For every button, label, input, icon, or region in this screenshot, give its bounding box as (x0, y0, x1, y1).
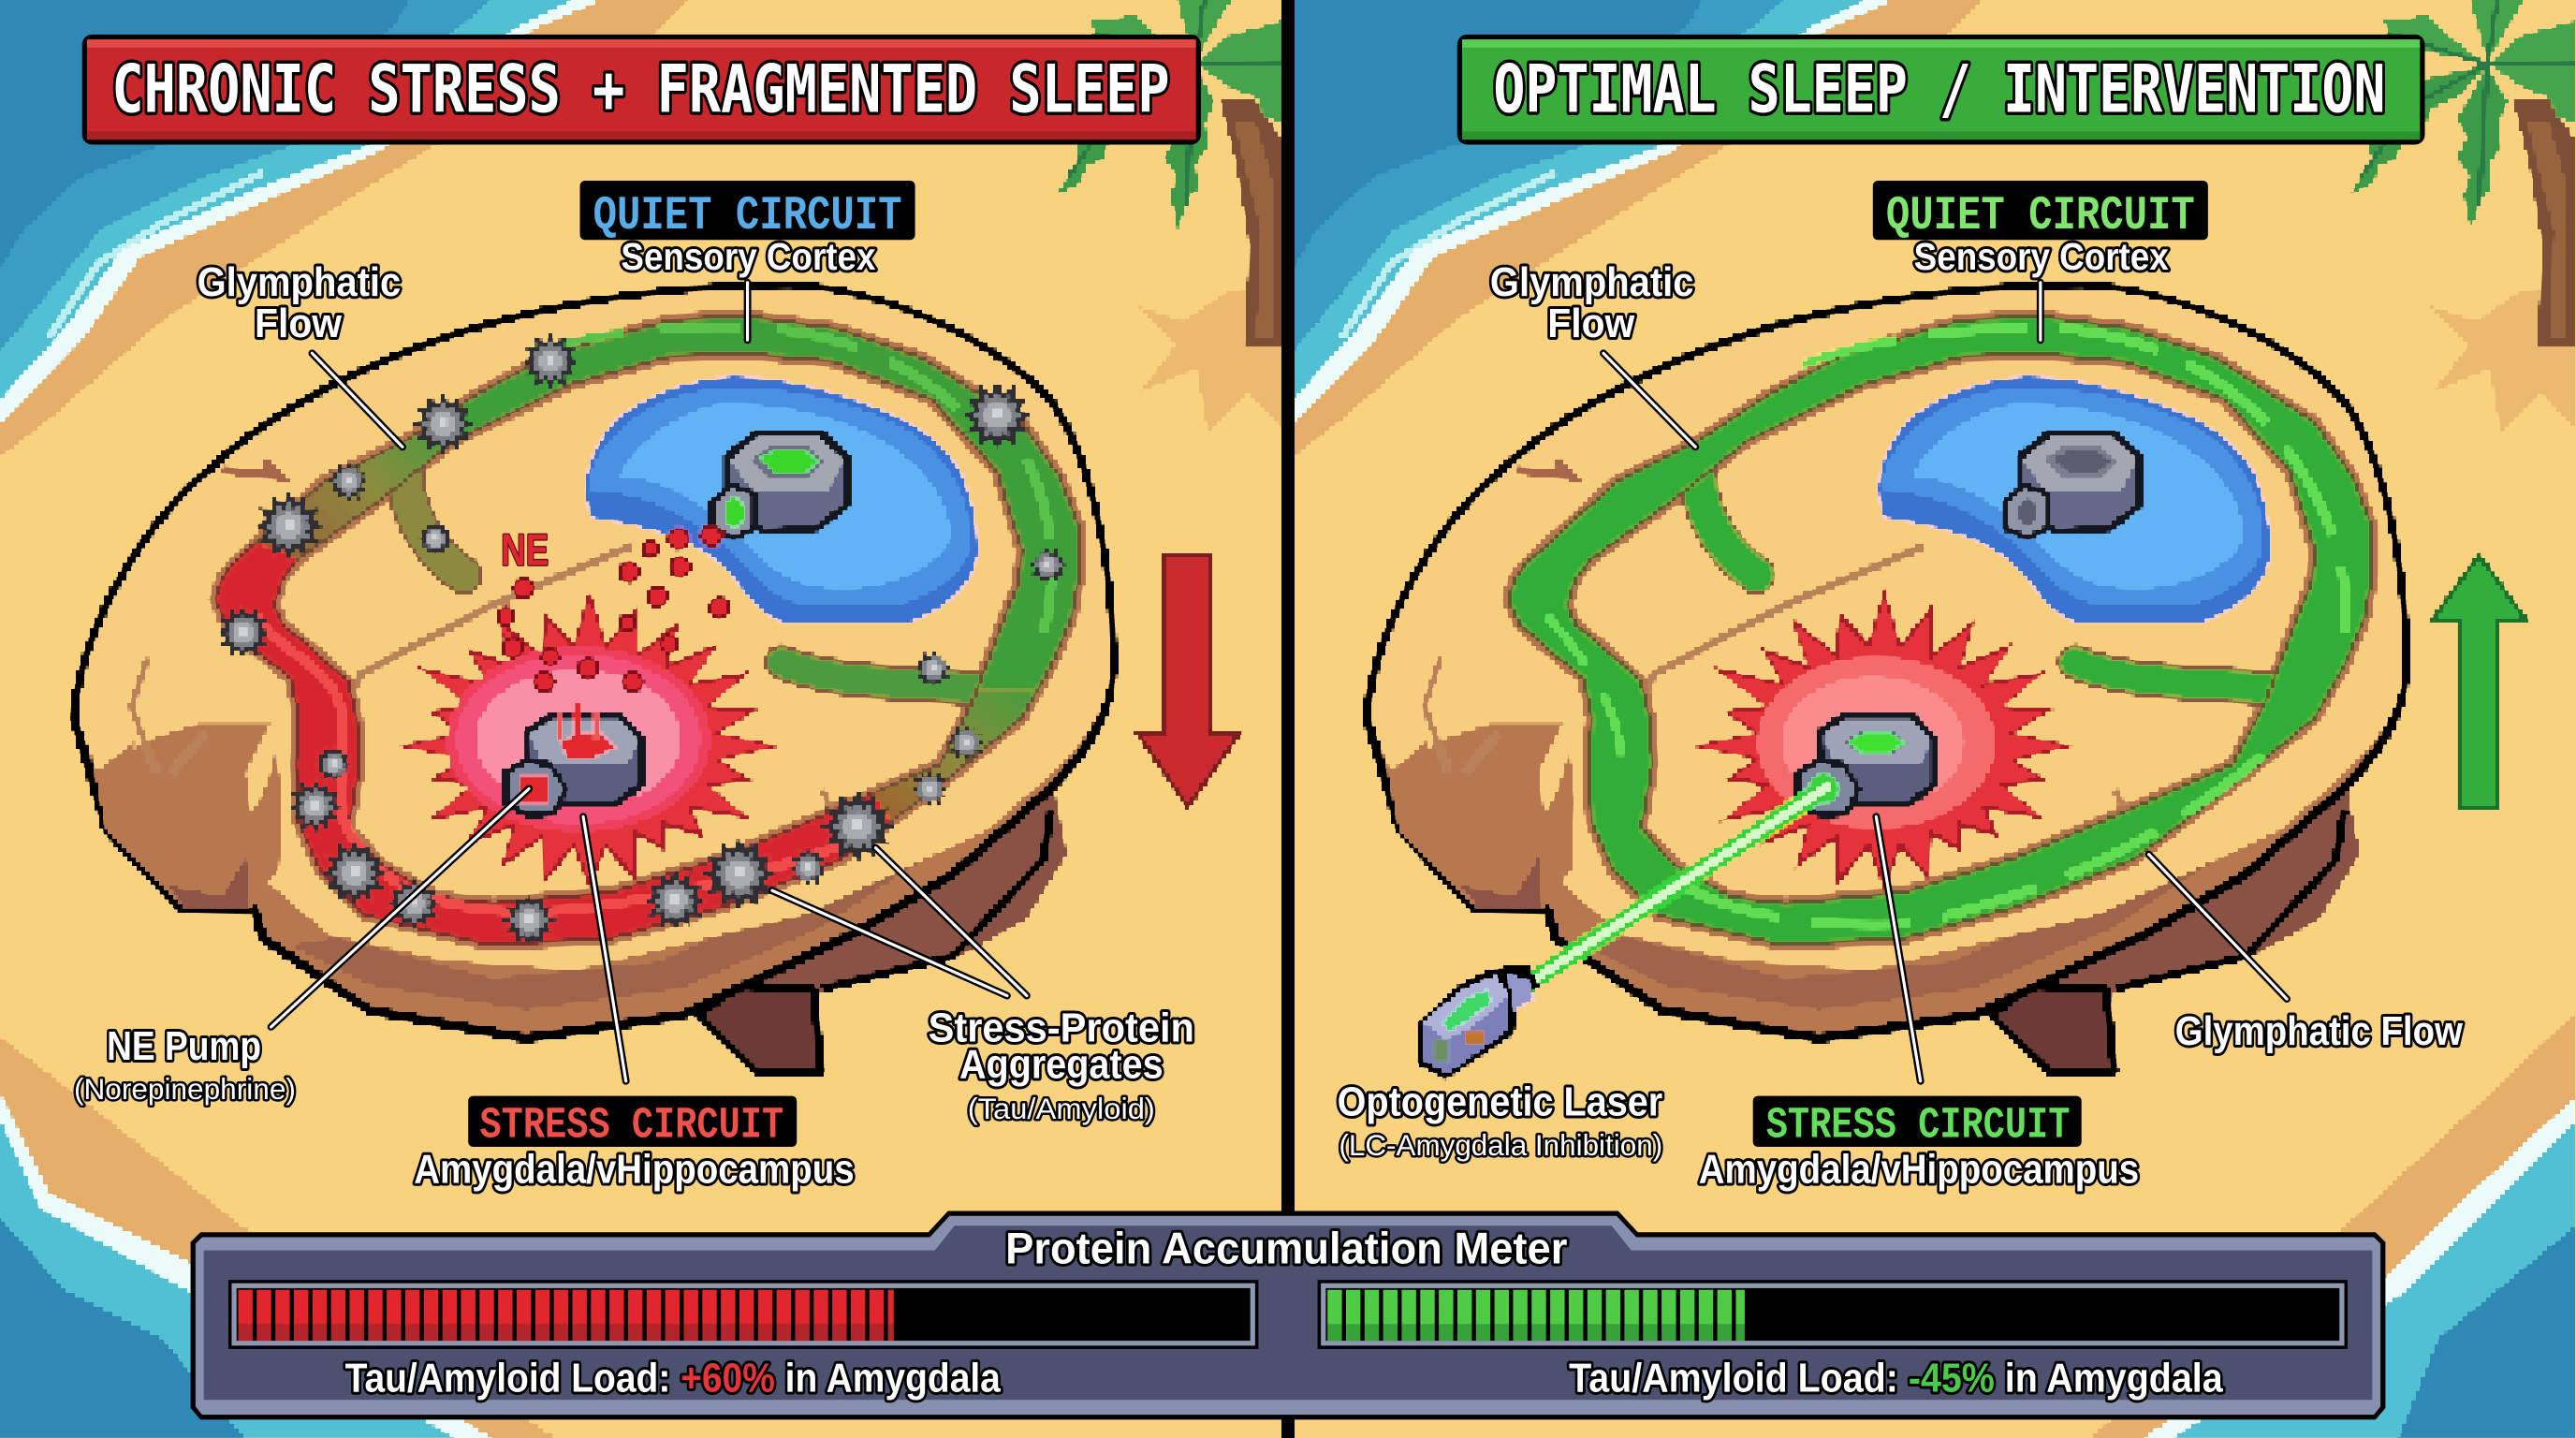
meter title: Protein Accumulation Meter (1005, 1225, 1567, 1274)
label: stress-protein aggregates (929, 1005, 1194, 1125)
label: glymphatic flow upper right: Glymphatic (1490, 259, 1694, 305)
beach and ocean corner, right panel (1293, 0, 1983, 459)
heading: optimal sleep: OPTIMAL SLEEP / INTERVENTION (1493, 51, 2385, 127)
label: NE pump: (Norepinephrine) (74, 1072, 296, 1106)
label: optogenetic laser (1338, 1079, 1662, 1162)
label: optogenetic laser: (LC-Amygdala Inhibition) (1339, 1128, 1662, 1162)
heading: optimal sleep (1457, 35, 2425, 144)
leader lines, left panel (271, 283, 1027, 1081)
optogenetic laser beam (1519, 787, 1827, 990)
stress load readout: Tau/Amyloid Load: +60% in Amygdala (345, 1356, 1001, 1401)
label: sensory cortex left: Sensory Cortex (621, 235, 876, 278)
glymphatic channel, clogged (215, 315, 1079, 945)
label: amygdala left: Amygdala/vHippocampus (414, 1147, 855, 1193)
lower-left ocean (0, 1035, 559, 1438)
red load bar (228, 1280, 1258, 1349)
lower-right ocean (2086, 1010, 2576, 1438)
green load bar (1318, 1280, 2348, 1349)
label: NE pump: NE Pump (107, 1023, 261, 1069)
amygdala device, green active (1794, 712, 1939, 820)
label: quiet circuit right: QUIET CIRCUIT (1886, 190, 2195, 243)
label: glymphatic flow upper right (1490, 259, 1694, 346)
label: glymphatic flow left: Flow (255, 301, 343, 346)
label: glymphatic flow upper right: Flow (1547, 301, 1635, 346)
stress-protein aggregates (220, 337, 1064, 943)
brain island, left panel (74, 286, 1112, 1071)
centre divider (1281, 0, 1295, 1438)
brain island, right panel (1367, 286, 2405, 1071)
label: amygdala right: Amygdala/vHippocampus (1699, 1147, 2139, 1193)
leader lines, right panel (1603, 283, 2287, 1081)
quiet circuit device, active green (708, 429, 851, 542)
palm tree, left panel (1055, 0, 1288, 435)
label: stress circuit left: STRESS CIRCUIT (479, 1101, 783, 1151)
arrow up, green (2432, 555, 2526, 808)
label: stress circuit right: STRESS CIRCUIT (1766, 1101, 2070, 1151)
glymphatic channel, clear (1508, 315, 2372, 945)
stress burst, right panel calmed (1687, 585, 2078, 893)
optogenetic laser device (1416, 966, 1541, 1081)
panel: optimal sleep and intervention (1293, 0, 2576, 1438)
label: NE pump (74, 1023, 296, 1106)
quiet lake, left panel (586, 376, 977, 624)
label: NE: NE (501, 526, 549, 576)
label: glymphatic flow lower right: Glymphatic Flow (2175, 1008, 2464, 1054)
NE norepinephrine particles (498, 526, 729, 692)
quiet lake, right panel (1879, 376, 2271, 624)
label: stress-protein aggregates: (Tau/Amyloid) (968, 1092, 1155, 1125)
label: glymphatic flow left: Glymphatic (198, 259, 401, 305)
panel: protein accumulation meter (191, 1211, 2385, 1419)
label: quiet circuit left: QUIET CIRCUIT (593, 190, 902, 243)
heading: chronic stress: CHRONIC STRESS + FRAGMENTED SLEEP (111, 51, 1170, 127)
label: sensory cortex right: Sensory Cortex (1914, 235, 2169, 278)
heading: chronic stress (82, 35, 1201, 144)
arrow down, red (1138, 555, 1238, 807)
left panel pixel art scene (0, 0, 1288, 1438)
label: stress-protein aggregates: Stress-Protein (929, 1005, 1194, 1051)
panel: chronic stress and fragmented sleep (0, 0, 1288, 1438)
label: glymphatic flow left (198, 259, 401, 346)
optimal load readout: Tau/Amyloid Load: -45% in Amygdala (1569, 1356, 2223, 1401)
NE pump device, stress circuit (501, 703, 646, 820)
stress burst, left panel (392, 585, 783, 893)
label: optogenetic laser: Optogenetic Laser (1338, 1079, 1662, 1125)
right panel pixel art scene (1293, 0, 2576, 1438)
palm tree, right panel (2348, 0, 2576, 435)
label: stress-protein aggregates: Aggregates (959, 1041, 1164, 1087)
quiet circuit device, idle grey (2001, 429, 2144, 542)
beach and ocean corner, left panel (0, 0, 690, 459)
meter frame (191, 1211, 2385, 1419)
